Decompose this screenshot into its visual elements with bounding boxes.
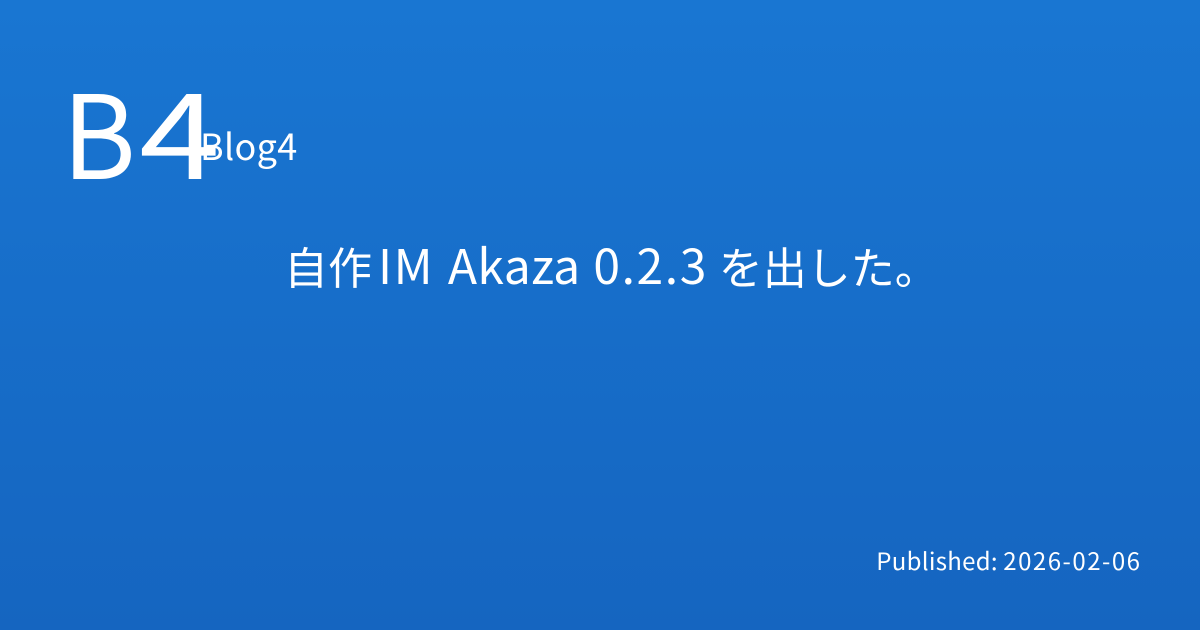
logo mark: B4: 4 [139,45,220,213]
published date: Published: 2026-02-06 [876,542,1142,577]
logo text: Blog4: Blog4 [200,119,297,171]
logo mark: B4: B [62,45,136,213]
title: 自作IM Akaza 0.2.3 を出した。 [284,228,939,298]
logo mark: B4 [62,45,220,213]
